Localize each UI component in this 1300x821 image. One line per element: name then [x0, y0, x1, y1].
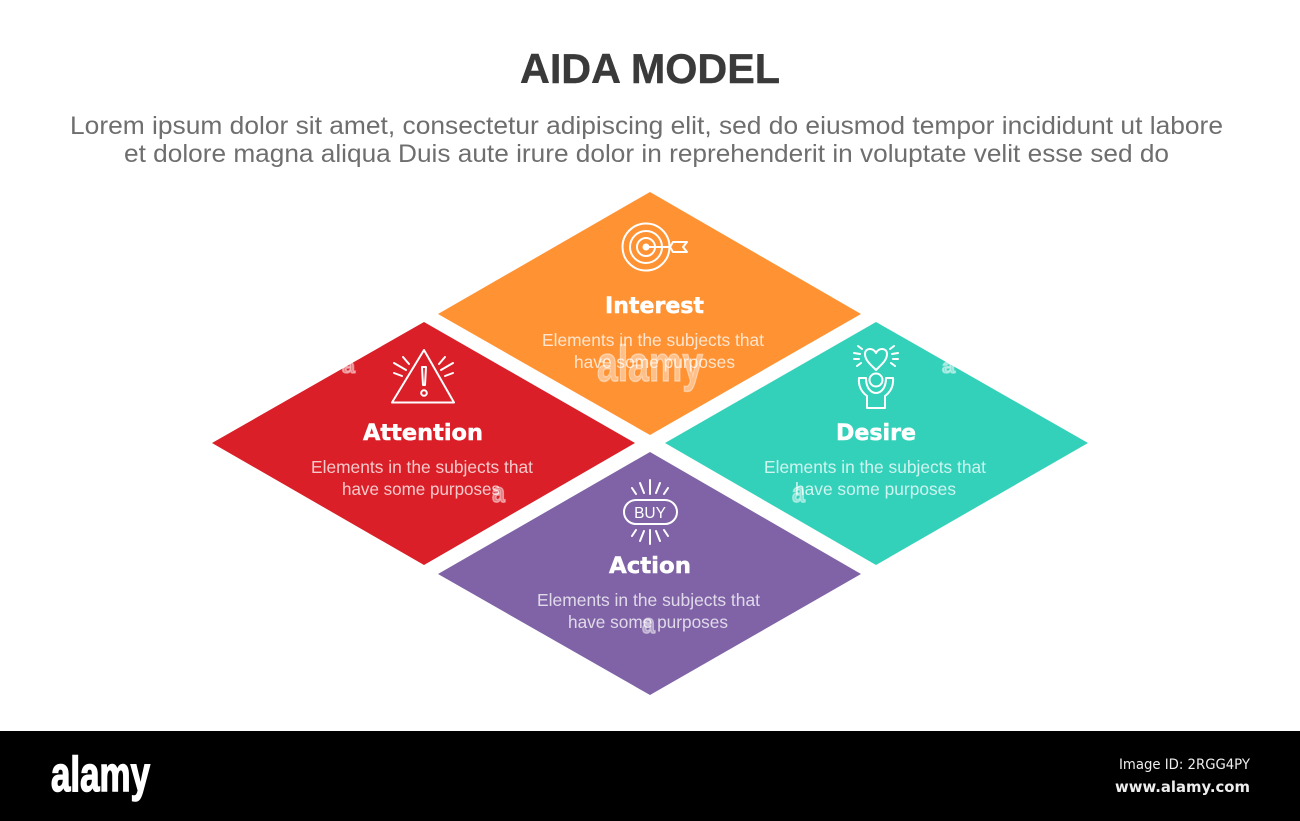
icon: target with arrow: [622, 224, 687, 270]
icon: buy button: [624, 480, 677, 544]
description: desire: Elements in the subjects that: [764, 457, 986, 477]
panel: action: [438, 452, 861, 695]
description: action: [537, 590, 760, 632]
title: AIDA MODEL: [520, 45, 780, 92]
heading: action: Action: [609, 553, 691, 579]
panel: attention: [212, 322, 635, 565]
diamond: action: [438, 452, 861, 695]
description: attention: have some purposes: [342, 479, 500, 499]
subtitle text block: Lorem ipsum dolor sit amet, consectetur adipiscing elit, sed do eiusmod tempor incididunt ut labore: [70, 112, 1223, 140]
image id: Image ID: 2RGG4PY: [1119, 757, 1250, 773]
website: www.alamy.com: [1115, 778, 1250, 796]
description: interest: have some purposes: [574, 352, 735, 372]
footer bar: [0, 731, 1300, 821]
icon: warning triangle: [392, 350, 454, 402]
panel: interest: [438, 192, 861, 435]
description: interest: Elements in the subjects that: [542, 330, 764, 350]
subtitle text block: et dolore magna aliqua Duis aute irure dolor in reprehenderit in voluptate velit esse sed do: [124, 140, 1169, 168]
description: desire: have some purposes: [795, 479, 956, 499]
diamond: interest: [438, 192, 861, 435]
heading: interest: Interest: [605, 293, 704, 319]
footer logo: alamy: [51, 748, 150, 802]
heading: attention: Attention: [363, 420, 483, 446]
diamond: desire: [665, 322, 1088, 565]
icon: hands holding heart: [854, 346, 898, 408]
diamond: attention: [212, 322, 635, 565]
icon: buy button: BUY: [634, 505, 666, 522]
watermarks: alamy: [597, 336, 703, 392]
watermarks: a: [942, 356, 956, 378]
watermarks: [342, 336, 956, 639]
watermarks: a: [492, 477, 505, 508]
subtitle text block: [70, 112, 1223, 168]
watermarks: a: [642, 608, 655, 639]
description: attention: Elements in the subjects that: [311, 457, 533, 477]
description: interest: [542, 330, 764, 372]
watermarks: a: [792, 477, 805, 508]
panel: desire: [665, 322, 1088, 565]
heading: desire: Desire: [836, 420, 916, 446]
description: action: have some purposes: [568, 612, 728, 632]
description: action: Elements in the subjects that: [537, 590, 760, 610]
description: desire: [764, 457, 986, 499]
watermarks: a: [342, 356, 356, 378]
description: attention: [311, 457, 533, 499]
